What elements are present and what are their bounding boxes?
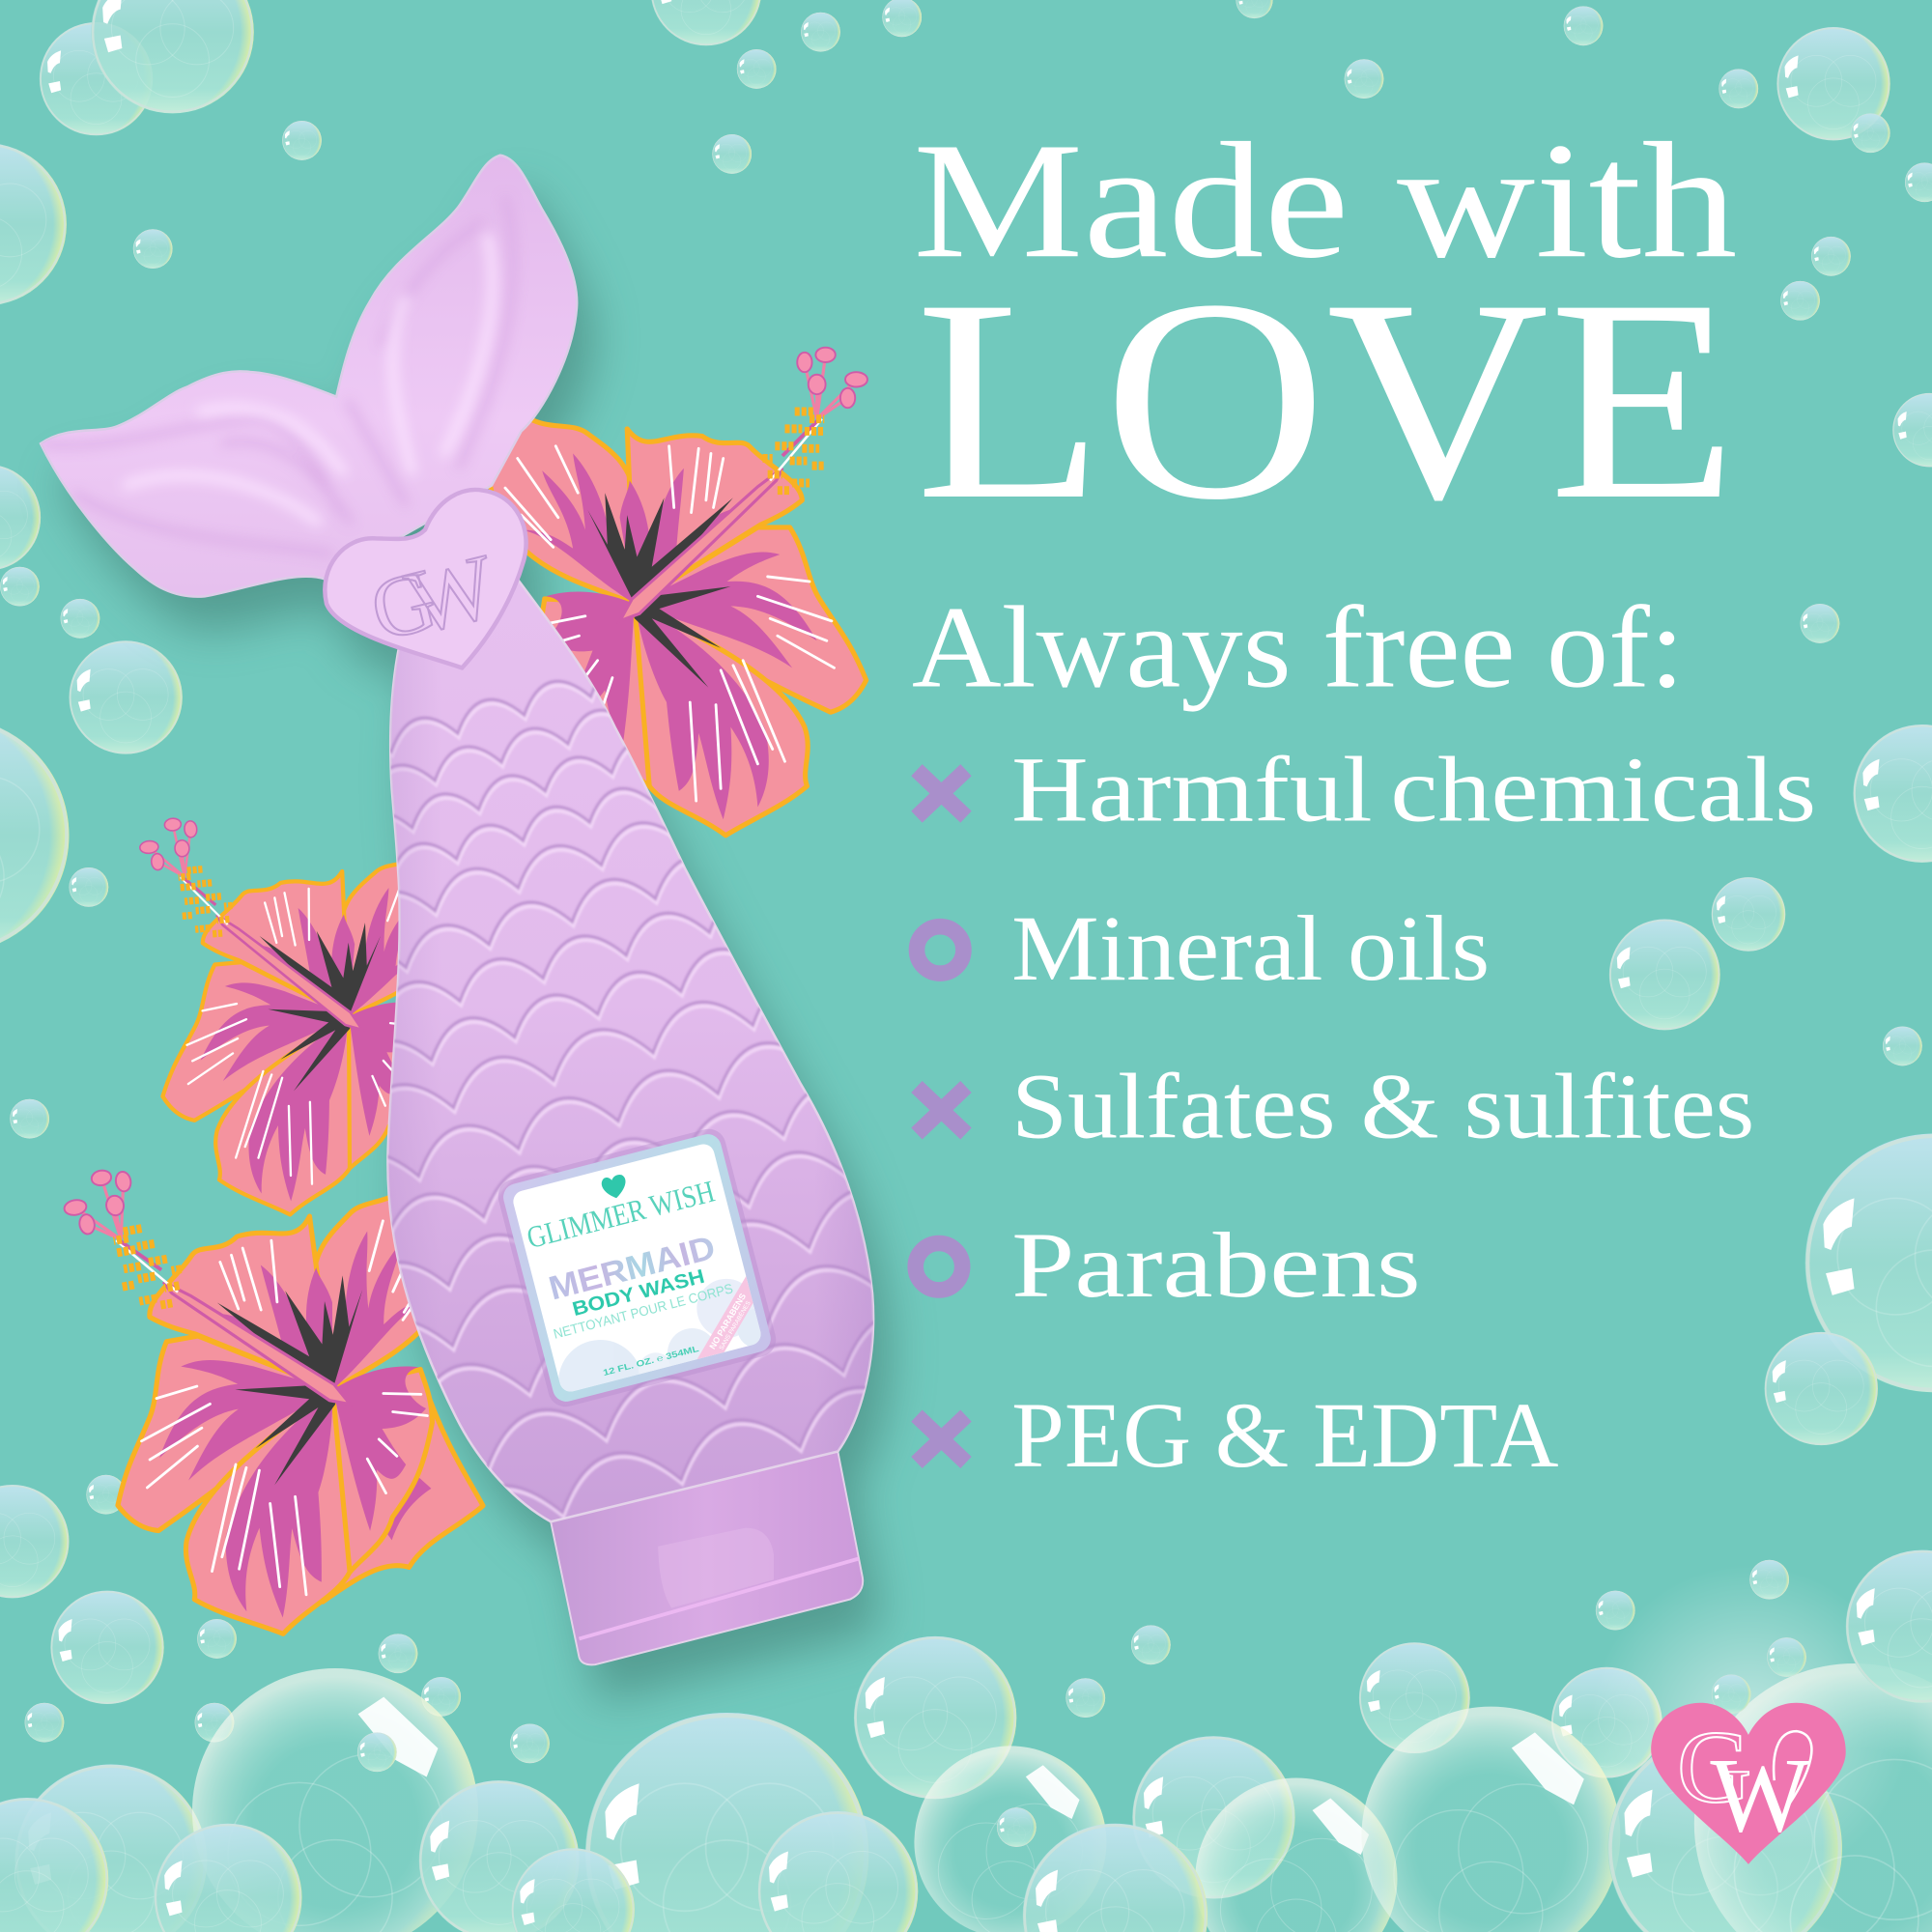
title: LOVE: LOVE [916,240,1737,559]
no parabens corner band: NO PARABENS [707,1292,748,1350]
icon: x mark [917,1416,966,1463]
icon: x mark [917,1087,966,1133]
body wash: BODY WASH [570,1266,707,1321]
bottle body with scales [386,580,875,1522]
icon: ring [916,1243,962,1290]
logo W loop [1774,1731,1811,1811]
French name: NETTOYANT POUR LE CORPS [552,1280,734,1342]
item: Parabens: Parabens [1011,1213,1421,1317]
item: Harmful chemicals: Harmful chemicals [1011,737,1816,840]
volume: 12 FL. OZ. ℮ 354ML [602,1344,700,1378]
tail fins [41,156,577,597]
bottle drop shadow [58,189,891,1699]
heart emblem with GW monogram [325,490,526,668]
logo W: W [1710,1736,1810,1854]
item: Sulfates & sulfites: Sulfates & sulfites [1011,1054,1754,1157]
brand name: GLIMMER WISH [524,1174,718,1255]
bottle cap [551,1452,863,1664]
soap bubbles: bottom foam [0,1550,1932,1932]
logo: pink GW heart [1651,1703,1846,1864]
no parabens corner band: SANS PARABÈNES [717,1299,753,1351]
product label [498,1128,776,1406]
title: Made with: Made with [913,109,1737,293]
item: Mineral oils: Mineral oils [1011,896,1490,1000]
engraved G: G [362,552,445,660]
label heart logo [600,1173,629,1201]
list: free-from items [916,737,1816,1487]
mermaid bottle [39,154,875,1665]
icon: x mark [917,770,966,817]
no parabens corner band [697,1276,753,1359]
engraved W: W [397,535,505,654]
item: PEG & EDTA: PEG & EDTA [1011,1383,1559,1487]
hibiscus flowers [59,348,867,1659]
product name: MERMAID [545,1230,719,1307]
icon: ring [917,926,963,974]
label bubbles [558,1279,761,1391]
subtitle: Always free of: [912,582,1685,712]
logo G: G [1677,1711,1751,1825]
